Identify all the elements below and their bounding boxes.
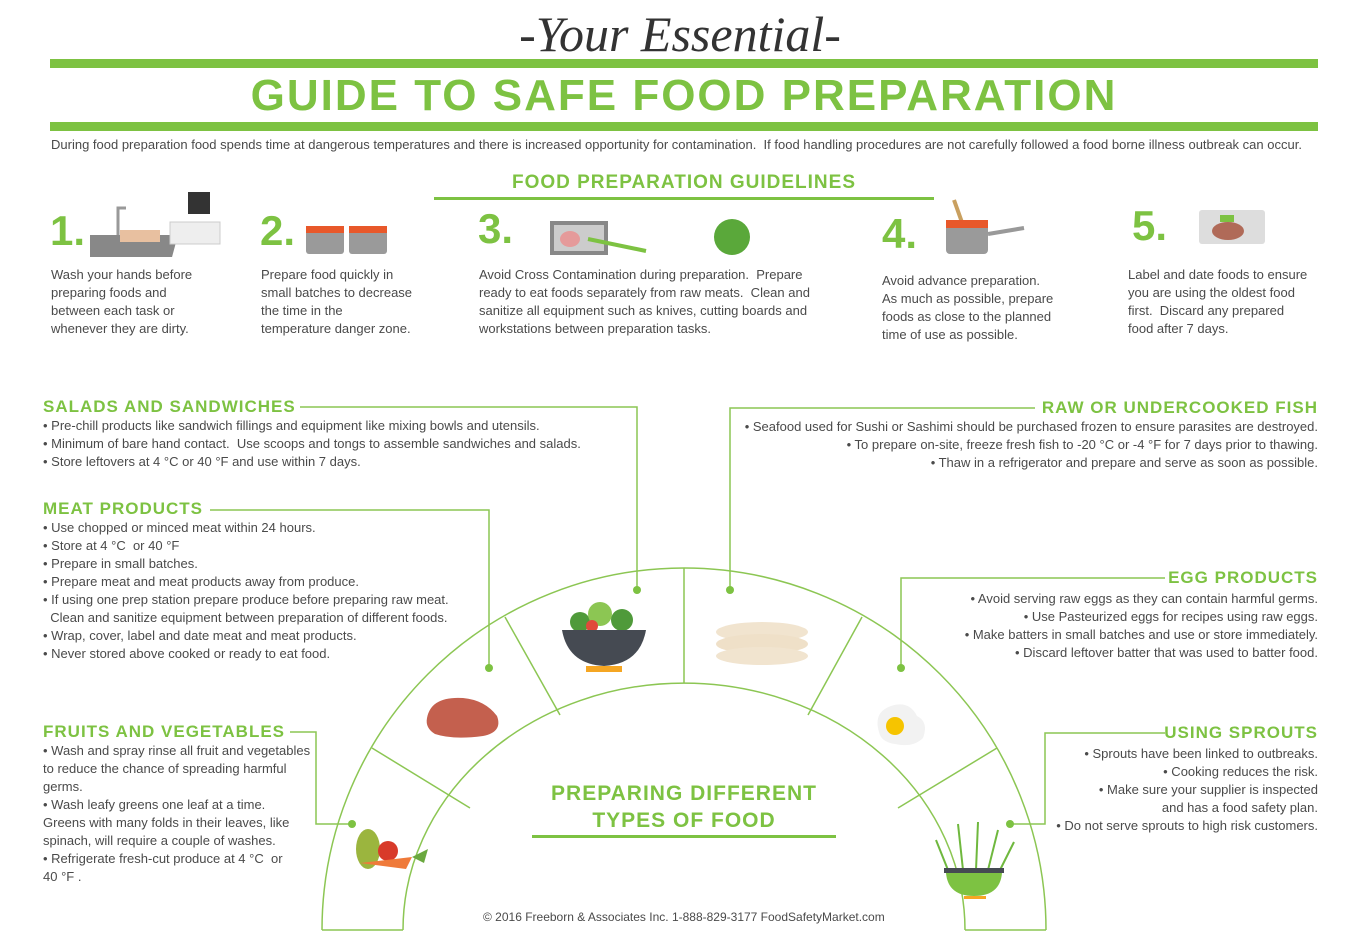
panel: salads and sandwiches: • Minimum of bare hand contact. Use scoops and tongs to assemble sandwiches and salads. (43, 436, 581, 451)
panel: using sprouts: • Sprouts have been linked to outbreaks. (1084, 746, 1318, 761)
step 5 text (1128, 267, 1307, 336)
step 3 text: sanitize all equipment such as knives, cutting boards and (479, 303, 807, 318)
step 2 (260, 207, 387, 254)
panel: using sprouts: USING SPROUTS (1164, 723, 1318, 742)
center heading: TYPES OF FOOD (592, 809, 776, 832)
title script: -Your Essential- (519, 6, 841, 62)
icon: fish (716, 622, 808, 665)
step 3 (478, 205, 750, 255)
panel: raw or undercooked fish: RAW OR UNDERCOOKED FISH (1042, 398, 1318, 417)
step 4 (882, 199, 1024, 257)
panel: salads and sandwiches (43, 397, 581, 469)
panel: salads and sandwiches: SALADS AND SANDWICHES (43, 397, 296, 416)
step 3 text (479, 267, 810, 336)
step 1 text: preparing foods and (51, 285, 167, 300)
footer copyright: © 2016 Freeborn & Associates Inc. 1-888-829-3177 FoodSafetyMarket.com (483, 910, 885, 924)
step 5 text: you are using the oldest food (1128, 285, 1295, 300)
center heading: PREPARING DIFFERENT (551, 782, 817, 805)
step 4 text: foods as close to the planned (882, 309, 1051, 324)
step 2: 2. (260, 207, 295, 254)
icon: fruits and vegetables (356, 829, 428, 869)
panel: fruits and vegetables: • Refrigerate fresh-cut produce at 4 °C or (43, 851, 283, 866)
icon: pots (306, 226, 387, 254)
panel: meat products: • Wrap, cover, label and date meat and meat products. (43, 628, 357, 643)
intro text: During food preparation food spends time at dangerous temperatures and there is increased opportunity for contamination. If food handling procedures are not carefully followed a food borne illness outbreak can occur. (51, 137, 1302, 152)
step 5 text: first. Discard any prepared (1128, 303, 1284, 318)
icon: saucepan (946, 199, 1024, 254)
step 4: 4. (882, 210, 917, 257)
panel: meat products: • If using one prep station prepare produce before preparing raw meat. (43, 592, 449, 607)
step 4 text: Avoid advance preparation. (882, 273, 1040, 288)
panel: fruits and vegetables: spinach, will require a couple of washes. (43, 833, 276, 848)
step 5: 5. (1132, 202, 1167, 249)
panel: meat products: Clean and sanitize equipment between preparation of different foods. (50, 610, 447, 625)
icon: salad bowl (562, 602, 646, 672)
icon: cutting board (550, 221, 646, 255)
step 2 text: the time in the (261, 303, 343, 318)
panel: raw or undercooked fish (745, 398, 1318, 470)
panel: using sprouts: and has a food safety plan. (1162, 800, 1318, 815)
step 1 text: between each task or (51, 303, 175, 318)
icon: food container (1199, 210, 1265, 244)
step 2 text: small batches to decrease (261, 285, 412, 300)
step 3 text: Avoid Cross Contamination during preparation. Prepare (479, 267, 802, 282)
panel: egg products (965, 568, 1318, 660)
panel: meat products: • Prepare in small batches. (43, 556, 198, 571)
icon: egg (878, 704, 925, 745)
top green bar (50, 59, 1318, 68)
panel: fruits and vegetables: • Wash and spray rinse all fruit and vegetables (43, 743, 310, 758)
step 1 text: whenever they are dirty. (51, 321, 189, 336)
step 3: 3. (478, 205, 513, 252)
step 3 text: ready to eat foods separately from raw meats. Clean and (479, 285, 810, 300)
panel: egg products: • Make batters in small batches and use or store immediately. (965, 627, 1318, 642)
step 1 (50, 192, 220, 257)
panel: egg products: • Use Pasteurized eggs for recipes using raw eggs. (1024, 609, 1318, 624)
panel: using sprouts: • Make sure your supplier is inspected (1099, 782, 1318, 797)
panel: meat products (43, 499, 449, 661)
panel: using sprouts: • Do not serve sprouts to high risk customers. (1056, 818, 1318, 833)
step 5 (1132, 202, 1265, 249)
step 4 text (882, 273, 1053, 342)
panel: salads and sandwiches: • Pre-chill products like sandwich fillings and equipment like mixing bowls and utensils. (43, 418, 540, 433)
panel: fruits and vegetables: FRUITS AND VEGETABLES (43, 722, 285, 741)
panel: egg products: • Discard leftover batter that was used to batter food. (1015, 645, 1318, 660)
panel: meat products: • Prepare meat and meat products away from produce. (43, 574, 359, 589)
panel: meat products: • Never stored above cooked or ready to eat food. (43, 646, 330, 661)
guidelines heading: FOOD PREPARATION GUIDELINES (512, 172, 856, 193)
panel: using sprouts: • Cooking reduces the risk. (1163, 764, 1318, 779)
icon: sink (90, 192, 220, 257)
panel: fruits and vegetables (43, 722, 310, 884)
step 1 text (51, 267, 192, 336)
panel: fruits and vegetables: to reduce the chance of spreading harmful (43, 761, 287, 776)
panel: fruits and vegetables: • Wash leafy greens one leaf at a time. (43, 797, 265, 812)
step 5 text: Label and date foods to ensure (1128, 267, 1307, 282)
panel: fruits and vegetables: Greens with many folds in their leaves, like (43, 815, 289, 830)
main title: GUIDE TO SAFE FOOD PREPARATION (251, 71, 1117, 120)
guidelines heading (434, 172, 934, 200)
step 2 text: temperature danger zone. (261, 321, 411, 336)
step 4 text: As much as possible, prepare (882, 291, 1053, 306)
step 1 text: Wash your hands before (51, 267, 192, 282)
step 3 text: workstations between preparation tasks. (479, 321, 711, 336)
icon: steak (426, 698, 498, 738)
panel: egg products: EGG PRODUCTS (1168, 568, 1318, 587)
panel: raw or undercooked fish: • Thaw in a refrigerator and prepare and serve as soon as possible. (931, 455, 1318, 470)
step 5 text: food after 7 days. (1128, 321, 1228, 336)
step 1: 1. (50, 207, 85, 254)
center heading (532, 780, 836, 838)
panel: meat products: MEAT PRODUCTS (43, 499, 203, 518)
panel: salads and sandwiches: • Store leftovers at 4 °C or 40 °F and use within 7 days. (43, 454, 361, 469)
icon: lettuce (714, 219, 750, 255)
panel: fruits and vegetables: germs. (43, 779, 83, 794)
panel: egg products: • Avoid serving raw eggs as they can contain harmful germs. (970, 591, 1318, 606)
panel: raw or undercooked fish: • Seafood used for Sushi or Sashimi should be purchased frozen to ensure parasites are destroyed. (745, 419, 1318, 434)
panel: raw or undercooked fish: • To prepare on-site, freeze fresh fish to -20 °C or -4 °F for 7 days prior to thawing. (847, 437, 1318, 452)
panel: using sprouts (1056, 723, 1318, 833)
panel: meat products: • Use chopped or minced meat within 24 hours. (43, 520, 316, 535)
panel: meat products: • Store at 4 °C or 40 °F (43, 538, 179, 553)
panel: fruits and vegetables: 40 °F . (43, 869, 81, 884)
icon: sprouts bowl (935, 822, 1015, 899)
step 2 text: Prepare food quickly in (261, 267, 393, 282)
bottom green bar (50, 122, 1318, 131)
step 2 text (261, 267, 412, 336)
step 4 text: time of use as possible. (882, 327, 1018, 342)
